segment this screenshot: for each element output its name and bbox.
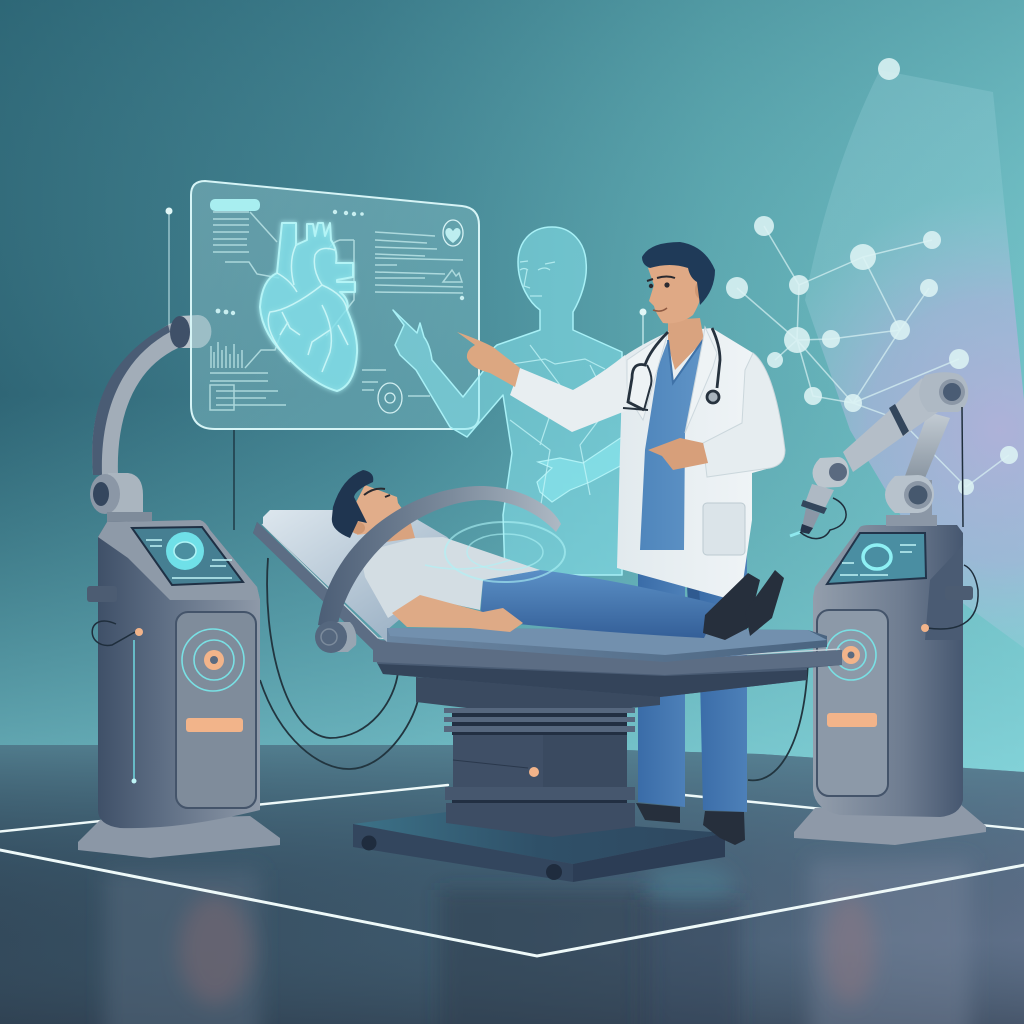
panel text lines: [210, 212, 463, 410]
small indicator pin: [640, 308, 646, 345]
floor: [0, 745, 1024, 1024]
right console screen: [827, 533, 926, 584]
patient arm: [392, 595, 523, 632]
small round target: [378, 383, 402, 413]
left console screen: [132, 527, 243, 585]
left machine arm: [90, 315, 211, 522]
imaging arch over patient: [315, 486, 561, 653]
doctor head: [642, 242, 715, 323]
hologram face details: [505, 261, 610, 510]
translucent light wedge: [805, 70, 1024, 648]
table base: [353, 812, 725, 882]
background wall: [0, 0, 1024, 790]
anatomical heart: [260, 223, 357, 391]
right console body: [813, 525, 963, 817]
patient table: [253, 510, 842, 697]
patient shoes: [703, 570, 784, 640]
right console: [794, 525, 986, 845]
table headrest: [263, 510, 470, 642]
holographic human: [393, 227, 622, 575]
table mattress: [387, 628, 827, 662]
panel title pill: [210, 199, 260, 211]
left console front panel: [176, 612, 256, 808]
small heart badge: [443, 220, 463, 246]
holographic chest rings: [425, 522, 565, 582]
left console base: [78, 816, 280, 858]
doctor pointing arm: [457, 332, 628, 432]
doctor left hand: [648, 438, 708, 470]
patient legs: [480, 570, 720, 638]
doctor legs: [636, 545, 747, 845]
molecular network: [726, 58, 1018, 495]
patient: [332, 470, 784, 640]
hologram body and head: [393, 227, 622, 575]
right console side details: [921, 565, 978, 632]
lab coat: [617, 318, 785, 602]
holographic data panel: [166, 181, 479, 530]
table frame: [253, 522, 842, 697]
patient neck and head: [378, 520, 415, 543]
table column: [416, 677, 660, 837]
stethoscope: [623, 328, 720, 410]
patient torso: [363, 537, 540, 618]
right robotic arm: [790, 372, 968, 539]
doctor: [457, 242, 785, 845]
left console side details: [87, 586, 143, 784]
left console: [78, 520, 280, 858]
floor glowing outline: [0, 785, 1024, 956]
right console front panel: [817, 610, 888, 796]
hologram lower arm and hand: [537, 437, 622, 502]
right console base: [794, 804, 986, 845]
left console body: [98, 520, 260, 828]
cables: [260, 558, 808, 780]
